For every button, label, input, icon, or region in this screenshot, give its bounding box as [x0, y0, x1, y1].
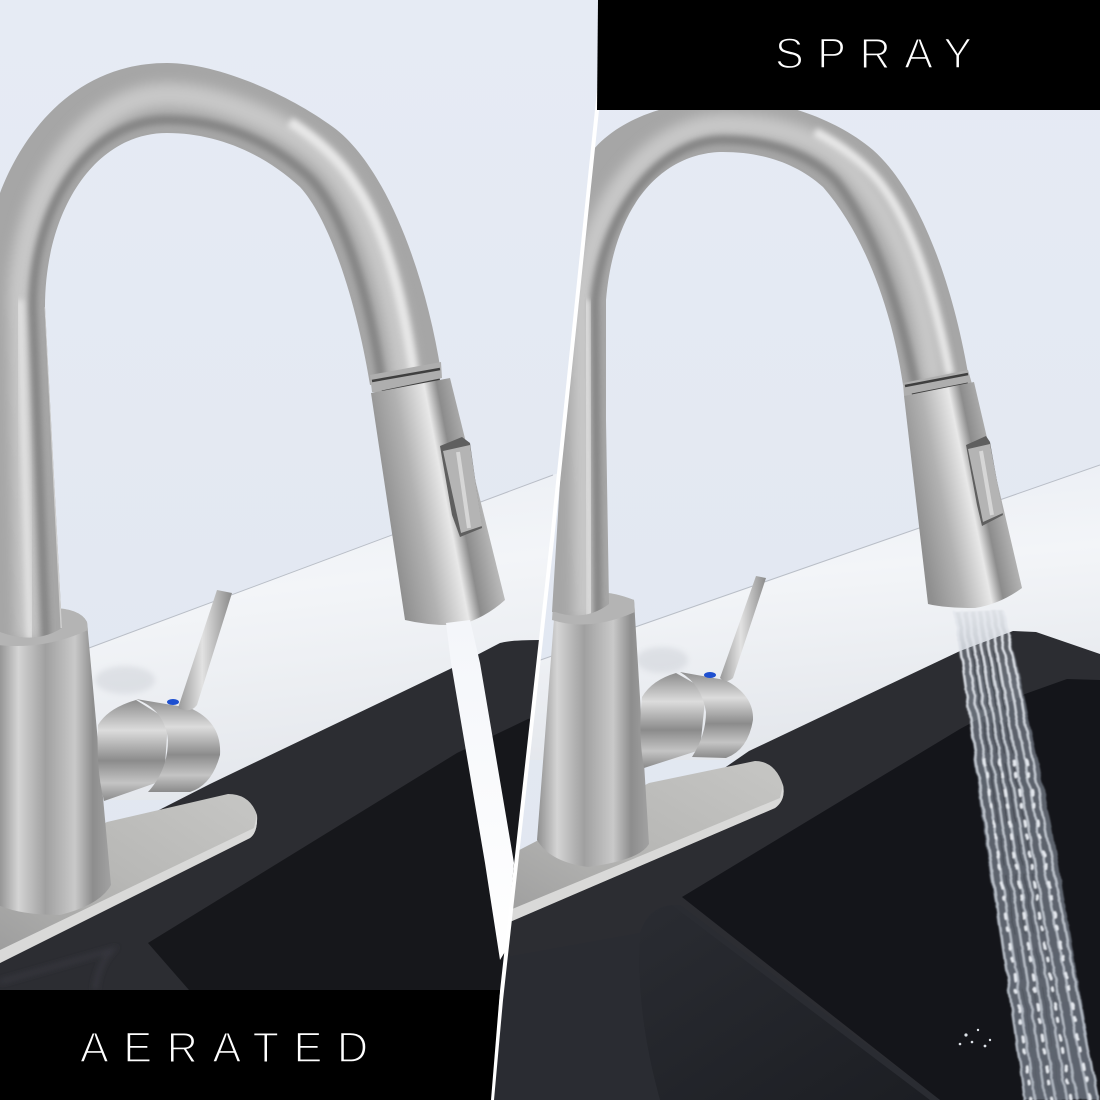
handle neck — [98, 700, 168, 801]
label text: spray: SPRAY — [775, 30, 972, 78]
rim highlight — [102, 950, 112, 958]
spout rings — [903, 370, 972, 397]
marble vein — [636, 647, 688, 673]
divider line — [492, 0, 608, 1100]
spout tube — [0, 50, 460, 650]
sink rim — [0, 640, 539, 1100]
spray head — [371, 378, 505, 625]
sink basin — [148, 718, 530, 990]
base plate — [500, 761, 784, 924]
label bar: aerated — [0, 990, 500, 1100]
wall — [0, 0, 598, 823]
marble top edge — [540, 464, 1100, 660]
marble vein — [95, 666, 155, 694]
base plate — [0, 794, 257, 963]
aerated stream — [446, 620, 514, 960]
marble top edge — [89, 475, 553, 648]
spray stream — [955, 610, 1098, 1100]
blue indicator — [167, 699, 179, 705]
second basin — [490, 905, 940, 1100]
spout tube — [552, 110, 968, 615]
lever — [178, 590, 232, 710]
water splash — [959, 1029, 991, 1047]
body collar — [552, 592, 635, 624]
lever — [720, 576, 766, 681]
spray head — [904, 382, 1022, 608]
wall — [520, 110, 1100, 850]
head button — [966, 436, 1003, 526]
label text: aerated: AERATED — [80, 1024, 368, 1072]
handle neck — [640, 673, 706, 768]
body collar — [0, 608, 88, 646]
marble backsplash — [90, 474, 556, 728]
handle cap — [680, 672, 753, 758]
label bar: spray — [597, 0, 1100, 110]
blue indicator — [704, 672, 716, 678]
marble backsplash — [537, 466, 1100, 696]
spout rings — [370, 362, 442, 393]
main basin — [682, 679, 1100, 1100]
panel: spray — [494, 110, 1100, 1100]
faucet body — [537, 594, 649, 867]
faucet body — [0, 608, 111, 915]
head button — [440, 437, 482, 537]
panel: aerated — [0, 0, 620, 1100]
handle cap — [136, 699, 220, 792]
sink rim — [490, 631, 1100, 1100]
